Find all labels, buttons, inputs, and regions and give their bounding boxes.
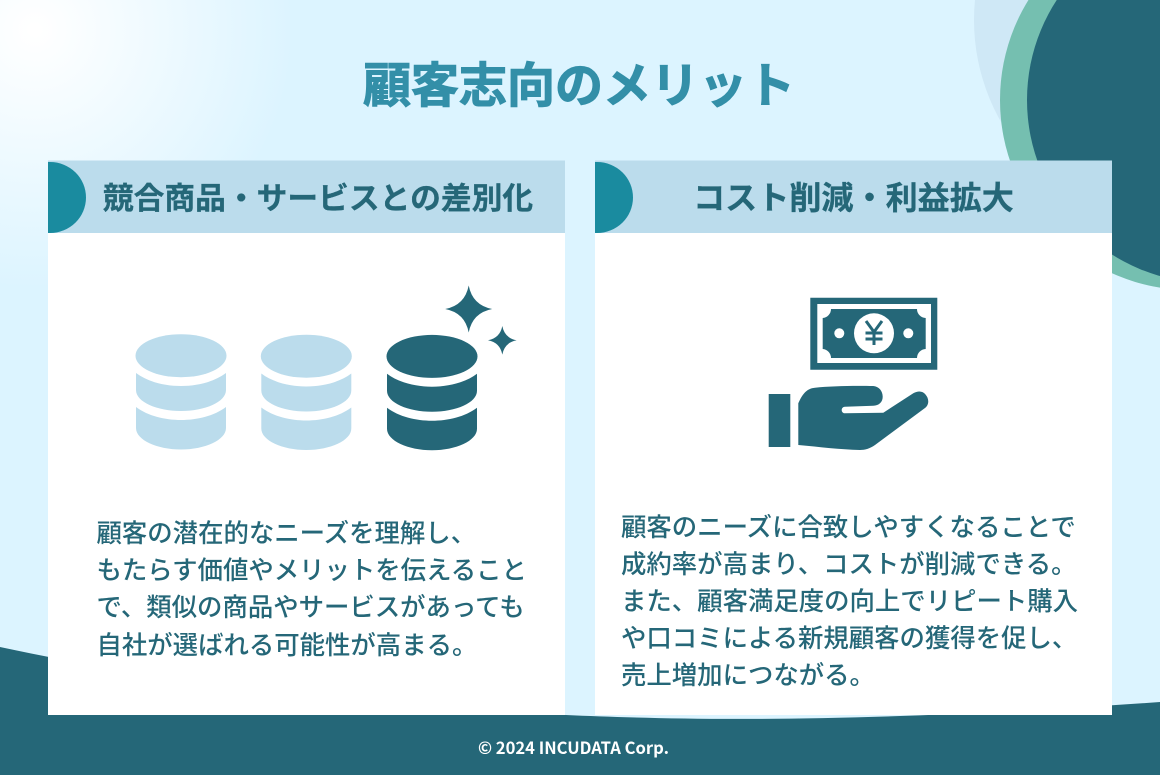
decorative circles top right <box>974 0 1160 290</box>
stack 1 <box>136 334 226 450</box>
stack 3 highlighted <box>386 335 478 450</box>
sparkles <box>445 286 517 355</box>
footer copyright: © 2024 INCUDATA Corp. <box>478 735 669 759</box>
panel text: 売上増加につながる。 <box>621 662 875 690</box>
banknote <box>810 298 937 370</box>
header marker <box>48 162 86 233</box>
panel text: もたらす価値やメリットを伝えること <box>96 557 527 585</box>
header marker <box>595 162 633 233</box>
icon: hand holding yen banknote <box>769 298 937 450</box>
panel text: 自社が選ばれる可能性が高まる。 <box>96 632 477 660</box>
footer wave <box>0 647 1160 775</box>
panel header band <box>48 160 565 233</box>
panel text <box>96 520 527 660</box>
panel text: や口コミによる新規顧客の獲得を促し、 <box>621 625 1077 653</box>
panel heading: コスト削減・利益拡大 <box>693 180 1014 216</box>
panel header band <box>595 160 1112 233</box>
panel: cost reduction <box>595 160 1112 715</box>
panel text: で、類似の商品やサービスがあっても <box>96 594 525 622</box>
panel body <box>595 233 1112 715</box>
panel text: また、顧客満足度の向上でリピート購入 <box>621 588 1078 616</box>
icon: three database stacks with sparkles <box>136 286 517 450</box>
panel text: 顧客のニーズに合致しやすくなることで <box>621 514 1076 542</box>
panel: differentiation <box>48 160 565 715</box>
panel body <box>48 233 565 715</box>
stack 2 <box>261 335 352 450</box>
hand <box>769 386 928 450</box>
panel heading: 競合商品・サービスとの差別化 <box>103 181 533 216</box>
panel text: 顧客の潜在的なニーズを理解し、 <box>96 520 476 548</box>
panel text: 成約率が高まり、コストが削減できる。 <box>621 551 1077 579</box>
title: 顧客志向のメリット <box>363 60 795 113</box>
panel text <box>621 514 1078 690</box>
